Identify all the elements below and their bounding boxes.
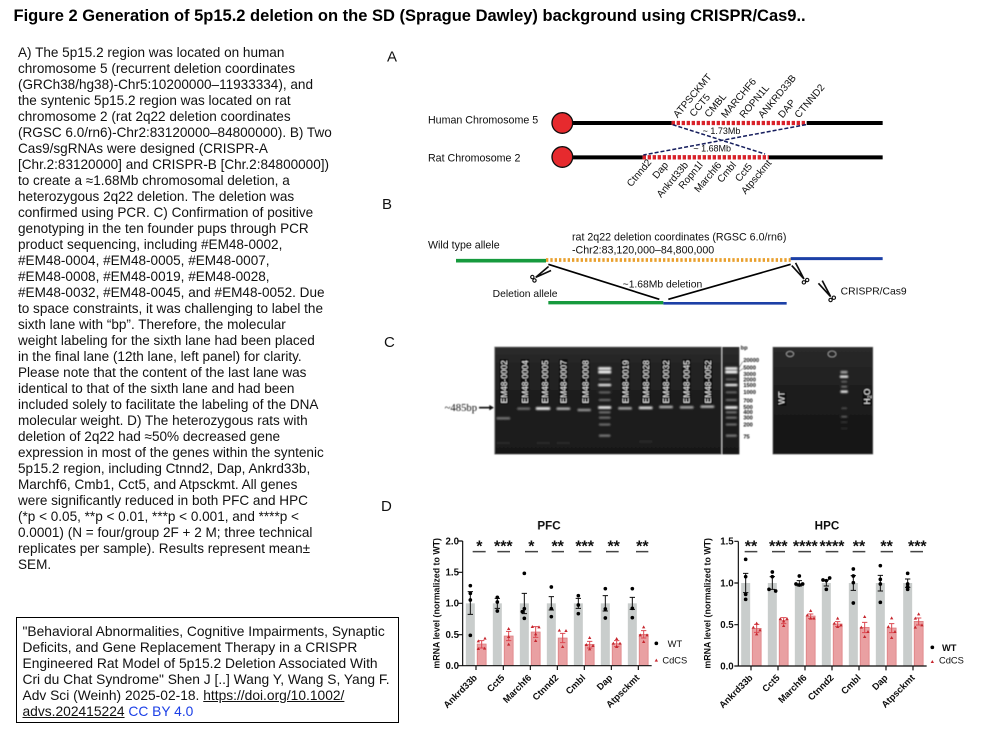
text block: figure description: genotyping in the ten founder pups through PCR bbox=[18, 221, 309, 236]
significance stars: ** bbox=[636, 538, 649, 555]
left gel image bbox=[495, 347, 721, 454]
legend bbox=[654, 639, 687, 666]
base pair size labels: 700 bbox=[743, 398, 753, 404]
rat gene labels: Marchf6 bbox=[693, 160, 725, 195]
text block: figure description: #EM48-0004, #EM48-0005, #EM48-0007, bbox=[18, 253, 270, 268]
human gene labels: ANKRD33B bbox=[757, 73, 799, 121]
legend bbox=[930, 643, 964, 666]
WT data points bbox=[746, 559, 908, 603]
lane labels: EM48-0032 bbox=[661, 360, 671, 403]
human gene labels: CCT5 bbox=[688, 92, 713, 119]
lane labels: EM48-0052 bbox=[703, 360, 713, 403]
size label 1.68Mb: ~ 1.68Mb bbox=[693, 144, 731, 154]
y axis label: mRNA level (normalized to WT) bbox=[703, 538, 713, 669]
significance stars: *** bbox=[769, 538, 788, 555]
base pair size labels: 2000 bbox=[743, 378, 756, 384]
deletion size label: ~1.68Mb deletion bbox=[623, 280, 702, 291]
significance stars: * bbox=[528, 538, 535, 555]
ladder strip with size labels bbox=[722, 345, 759, 454]
text block: figure description: identical to that of the sixth lane and had been bbox=[18, 381, 294, 396]
legend: WT bbox=[942, 643, 957, 653]
text block: figure description: (RGSC 6.0/rn6)-Chr2:83120000–84800000). B) Two bbox=[18, 125, 332, 140]
legend: WT bbox=[668, 639, 682, 649]
rat chromosome bar bbox=[552, 147, 883, 167]
base pair size labels: 200 bbox=[743, 423, 753, 429]
y axis tick labels: 0.5 bbox=[720, 620, 734, 631]
significance stars: ** bbox=[607, 538, 621, 555]
WT data points bbox=[470, 573, 632, 635]
gene labels: Cct5 bbox=[485, 673, 506, 694]
text block: figure description: (GRCh38/hg38)-Chr5:10200000–11933334), and bbox=[18, 77, 313, 92]
DNA ladder bbox=[598, 367, 611, 437]
rat gene labels: Ropn1l bbox=[677, 160, 706, 191]
deletion arrows bbox=[548, 264, 791, 299]
text block: figure description: to space constraints, it was challenging to label the bbox=[18, 301, 323, 316]
lane labels: EM48-0028 bbox=[641, 360, 651, 403]
significance stars: ** bbox=[880, 538, 894, 555]
WT error bars bbox=[468, 592, 635, 614]
text block: figure description: to create a ≈1.68Mb chromosomal deletion, a bbox=[18, 173, 290, 188]
callout: citation box bbox=[16, 617, 399, 723]
WT bars bbox=[741, 583, 912, 666]
y axis tick labels: 1.5 bbox=[446, 568, 460, 579]
callout: citation box: Adv Sci (Weinh) 2025-02-18. https://doi.org/10.1002/ bbox=[22, 688, 344, 703]
base pair size labels: bp bbox=[741, 345, 748, 351]
lane labels: EM48-0008 bbox=[580, 360, 590, 403]
significance stars: *** bbox=[908, 538, 927, 555]
deletion coordinates label: -Chr2:83,120,000–84,800,000 bbox=[572, 245, 714, 257]
base pair size labels: 1000 bbox=[743, 390, 756, 396]
panel letter A: A bbox=[387, 48, 397, 66]
lane labels: EM48-0005 bbox=[540, 360, 550, 403]
text block: figure description: confirmed using PCR. C) Confirmation of positive bbox=[18, 205, 313, 220]
gene labels bbox=[717, 672, 917, 710]
y axis tick labels: 1.5 bbox=[720, 537, 734, 548]
base pair size labels: 5000 bbox=[743, 366, 756, 372]
gene labels: Atpsckmt bbox=[604, 673, 641, 710]
gel wells bbox=[786, 351, 836, 357]
gene labels: Dap bbox=[595, 672, 615, 692]
significance stars: *** bbox=[575, 538, 595, 555]
base pair size labels: 400 bbox=[743, 410, 753, 416]
significance stars: ** bbox=[745, 538, 758, 555]
rat chromosome label: Rat Chromosome 2 bbox=[428, 153, 520, 165]
text block: figure description: Marchf6, Cmb1, Cct5, and Atpsckmt. All genes bbox=[18, 477, 297, 492]
text block: figure description: 5p15.2 region, including Ctnnd2, Dap, Ankrd33b, bbox=[18, 461, 310, 476]
text block: figure description: A) The 5p15.2 region was located on human bbox=[18, 45, 284, 60]
bar chart: PFC bbox=[432, 519, 687, 710]
CRISPR/Cas9 label: CRISPR/Cas9 bbox=[841, 286, 907, 297]
lane labels: EM48-0045 bbox=[682, 360, 692, 403]
y axis tick labels: 0.0 bbox=[720, 661, 734, 672]
text block: figure description: expression in most of the genes within the syntenic bbox=[18, 445, 324, 460]
panel A: chromosome synteny map bbox=[428, 72, 883, 200]
gene labels: Ctnnd2 bbox=[806, 673, 836, 702]
text block: figure description: [Chr.2:83120000] and CRISPR-B [Chr.2:84800000]) bbox=[18, 157, 329, 172]
text block: figure description: 0.0001) (N = four/group 2F + 2 M; three technical bbox=[18, 525, 312, 540]
icon: scissors legend bbox=[817, 280, 836, 302]
significance stars bbox=[745, 538, 927, 555]
y axis tick labels: 1.0 bbox=[720, 578, 734, 589]
title: Figure 2 Generation of 5p15.2 deletion on the SD (Sprague Dawley) background using CRISPR/Cas9.. bbox=[14, 7, 806, 25]
callout: citation box: Engineered Rat Model of 5p15.2 Deletion Associated With bbox=[22, 656, 378, 671]
human gene labels: CTNND2 bbox=[793, 82, 828, 121]
chart title: PFC bbox=[537, 519, 561, 532]
gene labels: Cct5 bbox=[760, 673, 782, 694]
sample bands bbox=[497, 406, 714, 444]
text block: figure description: Please note that the content of the last lane was bbox=[18, 365, 306, 380]
gene labels: Dap bbox=[870, 672, 890, 692]
rat gene labels: Dap bbox=[651, 160, 671, 181]
WT label: WT bbox=[777, 391, 787, 404]
rat gene labels: Ctnnd2 bbox=[625, 157, 655, 189]
right gel image bbox=[773, 347, 873, 454]
significance stars: * bbox=[476, 538, 483, 555]
base pair size labels: 75 bbox=[743, 434, 750, 440]
text block: figure description: chromosome 2 (rat 2q22 deletion coordinates bbox=[18, 109, 291, 124]
gene labels: Ankrd33b bbox=[442, 672, 479, 710]
CdCS error bars bbox=[754, 614, 921, 633]
text block: figure description: were significantly reduced in both PFC and HPC bbox=[18, 493, 308, 508]
rat gene labels bbox=[625, 157, 774, 200]
text block: figure description bbox=[18, 45, 332, 572]
significance stars: **** bbox=[820, 538, 845, 555]
H2O label: O bbox=[862, 388, 872, 395]
y axis tick labels: 2.0 bbox=[446, 536, 459, 547]
significance stars: ** bbox=[551, 538, 565, 555]
gene labels: Cmbl bbox=[839, 673, 863, 696]
y axis tick labels: 0.5 bbox=[446, 630, 460, 641]
text block: figure description: replicates per sample). Results represent mean± bbox=[18, 541, 310, 556]
base pair size labels: 3000 bbox=[743, 372, 756, 378]
text block: figure description: heterozygous 2q22 deletion. The deletion was bbox=[18, 189, 294, 204]
gene labels: Marchf6 bbox=[501, 673, 533, 705]
lane labels bbox=[499, 359, 713, 404]
base pair size labels: 300 bbox=[743, 416, 753, 422]
panel letter D: D bbox=[381, 498, 392, 515]
text block: figure description: the syntenic 5p15.2 region was located on rat bbox=[18, 93, 291, 108]
rat gene labels: Ankrd33b bbox=[655, 160, 691, 200]
human gene labels: MARCHF6 bbox=[720, 76, 759, 121]
axes bbox=[734, 541, 927, 670]
H2O label bbox=[862, 388, 873, 406]
base pair size labels: 500 bbox=[743, 405, 753, 411]
gene labels: Ankrd33b bbox=[717, 672, 755, 710]
485bp marker bbox=[445, 403, 494, 414]
CdCS bars bbox=[477, 632, 648, 666]
text block: figure description: molecular weight. D) The heterozygous rats with bbox=[18, 413, 308, 428]
icon: scissors left bbox=[530, 265, 552, 283]
text block: figure description: sixth lane with “bp”. Therefore, the molecular bbox=[18, 317, 286, 332]
significance stars: ** bbox=[853, 538, 866, 555]
WT bars bbox=[466, 603, 637, 666]
wild type allele bar bbox=[456, 259, 883, 261]
CdCS bars bbox=[752, 616, 923, 666]
y axis tick labels: 0.0 bbox=[446, 661, 459, 672]
WT error bars bbox=[743, 573, 910, 593]
H2O label: 2 bbox=[867, 395, 873, 398]
panel B: CRISPR deletion schematic bbox=[428, 232, 907, 303]
text block: figure description: Cas9/sgRNAs were designed (CRISPR-A bbox=[18, 141, 268, 156]
gene labels: Ctnnd2 bbox=[531, 673, 560, 702]
text block: figure description: #EM48-0008, #EM48-0019, #EM48-0028, bbox=[18, 269, 270, 284]
text block: figure description: included solely to facilitate the labeling of the DNA bbox=[18, 397, 318, 412]
deletion allele bar bbox=[548, 298, 787, 308]
CdCS error bars bbox=[479, 627, 646, 648]
significance bars bbox=[745, 549, 923, 554]
significance stars: **** bbox=[793, 538, 819, 555]
text block: figure description: weight labeling for the sixth lane had been placed bbox=[18, 333, 315, 348]
significance stars: *** bbox=[494, 538, 513, 555]
callout: citation box: Deficits, and Gene Replacement Therapy in a CRISPR bbox=[22, 640, 357, 655]
legend: CdCS bbox=[662, 656, 687, 666]
rat gene labels: Cct5 bbox=[733, 161, 755, 184]
y axis label: mRNA level (normalized to WT) bbox=[432, 538, 442, 669]
human chromosome bar bbox=[552, 113, 883, 133]
base pair size labels: 1500 bbox=[743, 383, 756, 389]
rat gene labels: Atpsckmt bbox=[739, 158, 774, 197]
panel letter B: B bbox=[382, 196, 392, 213]
panel C: PCR gels bbox=[445, 345, 873, 454]
right gel ladder bbox=[840, 371, 848, 429]
axes bbox=[458, 541, 652, 670]
human gene labels: DAP bbox=[777, 98, 798, 121]
wild type allele label: Wild type allele bbox=[428, 239, 500, 251]
deletion allele label: Deletion allele bbox=[493, 289, 558, 300]
text block: figure description: chromosome 5 (recurrent deletion coordinates bbox=[18, 61, 295, 76]
human gene labels: ATPSCKMT bbox=[672, 72, 714, 120]
callout: citation box: "Behavioral Abnormalities, Cognitive Impairments, Synaptic bbox=[22, 624, 385, 639]
gene labels bbox=[442, 672, 641, 710]
text block: figure description: #EM48-0032, #EM48-0045, and #EM48-0052. Due bbox=[18, 285, 325, 300]
lane labels: EM48-0002 bbox=[499, 360, 509, 403]
lane labels: EM48-0019 bbox=[620, 360, 630, 403]
y axis tick labels bbox=[446, 536, 460, 672]
legend: CdCS bbox=[939, 656, 964, 666]
gene labels: Atpsckmt bbox=[880, 673, 917, 710]
lane labels: EM48-0004 bbox=[520, 360, 530, 403]
text block: figure description: (*p < 0.05, **p < 0.01, ***p < 0.001, and ****p < bbox=[18, 509, 299, 524]
text block: figure description: in the final lane (12th lane, left panel) for clarity. bbox=[18, 349, 302, 364]
significance stars bbox=[476, 538, 649, 555]
deletion coordinates label bbox=[572, 232, 786, 257]
base pair size labels: 20000 bbox=[743, 358, 759, 364]
size label 1.73Mb: ~ 1.73Mb bbox=[703, 126, 740, 136]
human gene labels: CMBL bbox=[703, 91, 729, 120]
text block: figure description: product sequencing, including #EM48-0002, bbox=[18, 237, 282, 252]
callout: citation box: advs.202415224 CC BY 4.0 bbox=[22, 704, 193, 719]
y axis tick labels: 1.0 bbox=[446, 599, 459, 610]
deletion coordinates label: rat 2q22 deletion coordinates (RGSC 6.0/rn6) bbox=[572, 232, 786, 244]
CdCS data points bbox=[477, 625, 649, 650]
text block: figure description: deletion of 2q22 had ≈50% decreased gene bbox=[18, 429, 280, 444]
gene labels: Marchf6 bbox=[776, 673, 809, 705]
human gene labels: ROPN1L bbox=[738, 83, 772, 121]
icon: scissors right bbox=[791, 262, 809, 285]
H2O label: H bbox=[862, 398, 872, 404]
lane labels: EM48-0007 bbox=[558, 360, 568, 403]
panel letter C: C bbox=[384, 334, 395, 351]
bar chart: HPC bbox=[703, 519, 964, 710]
base pair size labels bbox=[741, 345, 759, 440]
synteny dashed connectors bbox=[643, 125, 806, 155]
text block: figure description: SEM. bbox=[18, 557, 51, 572]
significance bars bbox=[473, 549, 648, 554]
485bp marker: ~485bp bbox=[445, 403, 477, 414]
human chromosome label: Human Chromosome 5 bbox=[428, 114, 538, 126]
y axis tick labels bbox=[720, 537, 734, 672]
CdCS data points bbox=[752, 609, 924, 639]
callout: citation box: Cri du Chat Syndrome" Shen J [..] Wang Y, Wang S, Yang F. bbox=[22, 672, 390, 687]
gene labels: Cmbl bbox=[564, 673, 587, 696]
human gene labels bbox=[672, 72, 828, 121]
chart title: HPC bbox=[815, 519, 840, 532]
rat gene labels: Cmbl bbox=[716, 160, 739, 185]
